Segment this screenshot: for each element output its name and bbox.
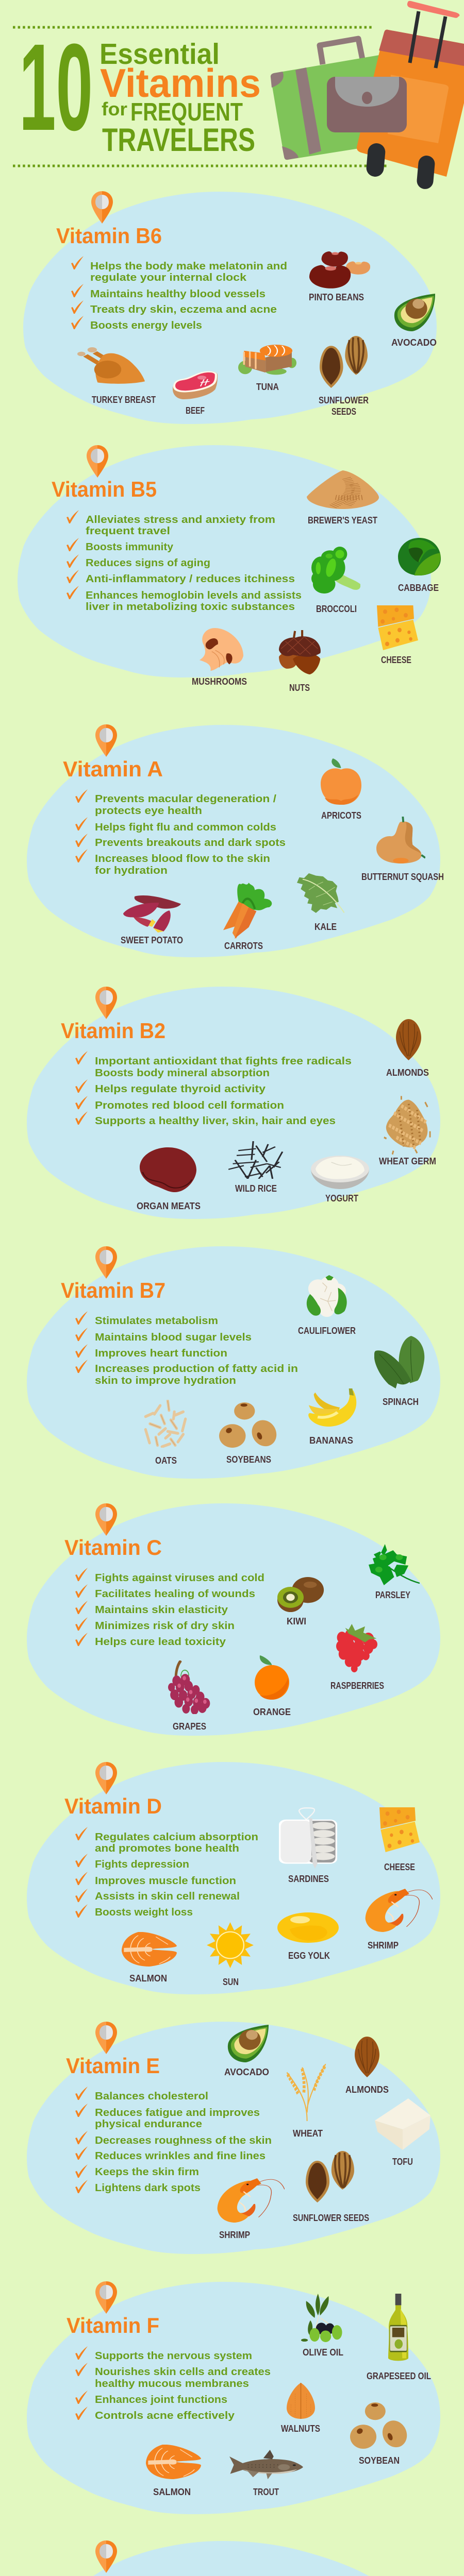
benefits list: Supports a healthy liver, skin, hair and eyes	[95, 1115, 336, 1127]
benefits list: Promotes red blood cell formation	[95, 1100, 284, 1111]
label: wheat germ: WHEAT GERM	[379, 1156, 436, 1166]
label: salmon: SALMON	[129, 1973, 167, 1984]
benefits list: Increases blood flow to the skin	[95, 853, 270, 865]
label: orange: ORANGE	[253, 1707, 291, 1717]
title line Vitamins: Vitamins	[100, 60, 261, 106]
icon: tuna	[238, 345, 296, 375]
benefits list	[75, 2087, 272, 2194]
label: sunflower seeds: SUNFLOWER SEEDS	[293, 2213, 369, 2223]
benefits list: Helps fight flu and common colds	[95, 822, 276, 833]
icon: oats	[145, 1401, 186, 1447]
label: trout: TROUT	[253, 2487, 279, 2497]
label: avocado: AVOCADO	[224, 2067, 269, 2077]
benefits list: Boosts energy levels	[90, 320, 202, 331]
label: tofu: TOFU	[392, 2157, 413, 2167]
icon: sweet potato	[123, 895, 181, 933]
benefits list: Keeps the skin firm	[95, 2166, 199, 2178]
benefits list: Reduces fatigue and improves	[95, 2107, 260, 2119]
label: spinach: SPINACH	[383, 1397, 419, 1407]
label: apricots: APRICOTS	[321, 810, 361, 821]
benefits list	[75, 1051, 352, 1127]
benefits list: Boosts immunity	[86, 541, 174, 553]
icon: grapes	[168, 1660, 210, 1715]
icon: shrimp	[366, 1889, 433, 1932]
panel: Vitamin F	[27, 2281, 440, 2514]
benefits list	[75, 1568, 264, 1648]
label: avocado: AVOCADO	[391, 337, 437, 348]
benefits list	[75, 1311, 298, 1386]
benefits list: Increases production of fatty acid in	[95, 1363, 298, 1375]
benefits list: Helps cure lead toxicity	[95, 1636, 226, 1648]
benefits list: Boosts body mineral absorption	[95, 1067, 270, 1079]
benefits list: Assists in skin cell renewal	[95, 1891, 240, 1902]
benefits list: for hydration	[95, 865, 168, 876]
heading: Vitamin A	[63, 757, 163, 781]
icon: bananas	[308, 1388, 356, 1427]
benefits list: Improves muscle function	[95, 1875, 236, 1887]
label: cheese: CHEESE	[384, 1862, 415, 1872]
icon: brewer's yeast	[307, 470, 379, 509]
benefits list: protects eye health	[95, 805, 202, 817]
benefits list: healthy mucous membranes	[95, 2378, 249, 2389]
panel: Vitamin E	[27, 2022, 440, 2254]
icon: sardines	[279, 1808, 337, 1869]
label: sunflower seeds: SUNFLOWER	[319, 395, 369, 405]
blob background	[27, 2541, 440, 2576]
panel: Vitamin A	[27, 724, 444, 957]
icon: grapeseed oil	[388, 2294, 408, 2361]
title word for: for	[102, 98, 127, 120]
icon: mushrooms	[200, 628, 243, 671]
blob background	[23, 192, 437, 424]
label: walnuts: WALNUTS	[281, 2424, 320, 2434]
label: sunflower seeds	[319, 395, 369, 417]
icon: spinach	[374, 1336, 424, 1388]
heading: Vitamin B6	[56, 224, 162, 248]
panel: Vitamin C	[27, 1503, 440, 1736]
blob background	[27, 1503, 440, 1736]
benefits list	[67, 510, 302, 613]
benefits list	[75, 2346, 271, 2421]
benefits list: Maintains skin elasticity	[95, 1604, 228, 1616]
heading: Vitamin D	[64, 1794, 162, 1818]
green suitcase handle	[320, 39, 362, 64]
icon: shrimp	[218, 2178, 285, 2223]
icon: broccoli	[311, 547, 360, 594]
heading: Vitamin B5	[52, 477, 157, 501]
benefits list: Enhances joint functions	[95, 2394, 227, 2405]
blob background	[27, 2282, 440, 2514]
benefits list: Important antioxidant that fights free radicals	[95, 1056, 352, 1067]
icon: location pin	[95, 2022, 117, 2054]
icon: wild rice	[228, 1141, 283, 1179]
header	[13, 1, 464, 189]
title number 10: 10	[19, 18, 93, 156]
benefits list	[75, 1827, 258, 1918]
icon: location pin	[95, 1503, 117, 1536]
label: almonds: ALMONDS	[386, 1067, 429, 1078]
benefits list: Maintains blood sugar levels	[95, 1332, 252, 1343]
label: grapeseed oil: GRAPESEED OIL	[367, 2371, 431, 2381]
benefits list: Decreases roughness of the skin	[95, 2135, 272, 2146]
icon: trout	[229, 2450, 303, 2479]
label: sweet potato: SWEET POTATO	[121, 935, 183, 945]
label: nuts: NUTS	[289, 683, 310, 693]
icon: cheese	[379, 1807, 420, 1852]
icon: raspberries	[336, 1624, 377, 1672]
icon: location pin	[95, 1762, 117, 1794]
label: carrots: CARROTS	[224, 941, 263, 951]
orange suitcase	[357, 30, 464, 177]
benefits list: Boosts weight loss	[95, 1907, 193, 1918]
label: soybean: SOYBEAN	[359, 2455, 400, 2466]
icon: almonds	[355, 2037, 379, 2077]
heading: Vitamin F	[67, 2313, 159, 2337]
icon: parsley	[369, 1544, 420, 1585]
benefits list: Minimizes risk of dry skin	[95, 1620, 235, 1632]
label: tuna: TUNA	[256, 382, 279, 392]
label: grapes: GRAPES	[173, 1721, 206, 1732]
icon: avocado	[228, 2025, 269, 2062]
icon: beef	[173, 371, 218, 399]
panel: Vitamin D	[27, 1762, 440, 1994]
icon: yogurt	[311, 1156, 369, 1189]
benefits list: Improves heart function	[95, 1348, 227, 1359]
icon: location pin	[95, 987, 117, 1019]
label: egg yolk: EGG YOLK	[288, 1951, 330, 1961]
icon: soybean	[350, 2402, 409, 2449]
benefits list: Enhances hemoglobin levels and assists	[86, 590, 302, 601]
benefits list: Fights depression	[95, 1859, 189, 1870]
blob background	[27, 725, 440, 957]
label: cabbage: CABBAGE	[398, 583, 439, 593]
benefits list: Treats dry skin, eczema and acne	[90, 304, 277, 315]
blob background	[27, 2022, 440, 2254]
benefits list	[71, 256, 287, 331]
icon: butternut squash	[376, 817, 425, 863]
blob background	[27, 1246, 440, 1479]
benefits list: and promotes bone health	[95, 1843, 239, 1854]
panel: Vitamin B6	[23, 191, 437, 424]
benefits list: Anti-inflammatory / reduces itchiness	[86, 573, 295, 585]
benefits list: regulate your internal clock	[90, 272, 247, 283]
label: brewer's yeast: BREWER'S YEAST	[308, 515, 377, 526]
small bag	[327, 77, 407, 132]
icon: luggage	[271, 1, 464, 190]
label: kiwi: KIWI	[287, 1616, 306, 1626]
icon: sunflower seeds	[306, 2151, 354, 2202]
label: salmon: SALMON	[153, 2487, 191, 2497]
label: sardines: SARDINES	[288, 1874, 329, 1884]
icon: cauliflower	[307, 1275, 347, 1317]
benefits list: Supports the nervous system	[95, 2350, 252, 2362]
icon: carrots	[223, 883, 272, 939]
label: almonds: ALMONDS	[345, 2084, 389, 2095]
icon: wheat	[287, 2064, 326, 2121]
label: shrimp: SHRIMP	[368, 1940, 399, 1951]
benefits list: Prevents breakouts and dark spots	[95, 837, 286, 849]
label: sun: SUN	[223, 1977, 239, 1987]
benefits list	[75, 789, 286, 876]
title word FREQUENT: FREQUENT	[130, 98, 243, 126]
benefits list: skin to improve hydration	[95, 1375, 236, 1386]
label: wheat: WHEAT	[293, 2128, 323, 2139]
label: pinto beans: PINTO BEANS	[309, 292, 364, 302]
icon: kale	[297, 873, 344, 913]
icon: location pin	[95, 724, 117, 757]
icon: cheese	[377, 605, 418, 650]
heading: Vitamin C	[64, 1535, 162, 1560]
icon: salmon	[146, 2445, 201, 2479]
panel: Vitamin B7	[27, 1246, 440, 1479]
icon: location pin	[95, 2281, 117, 2314]
label: yogurt: YOGURT	[325, 1193, 358, 1204]
label: sunflower seeds: SEEDS	[332, 406, 356, 417]
benefits list: Maintains healthy blood vessels	[90, 289, 266, 300]
label: raspberries: RASPBERRIES	[330, 1681, 384, 1691]
icon: sun	[207, 1922, 254, 1968]
benefits list: Reduces wrinkles and fine lines	[95, 2150, 266, 2162]
benefits list: Prevents macular degeneration /	[95, 793, 276, 805]
icon: avocado	[394, 294, 435, 331]
label: mushrooms: MUSHROOMS	[192, 676, 247, 687]
heading: Vitamin E	[66, 2054, 160, 2078]
icon: location pin	[95, 2540, 117, 2573]
icon: nuts	[279, 630, 321, 674]
benefits list: physical endurance	[95, 2119, 202, 2130]
label: soybeans: SOYBEANS	[226, 1454, 271, 1465]
label: butternut squash: BUTTERNUT SQUASH	[361, 872, 444, 882]
benefits list: Facilitates healing of wounds	[95, 1588, 255, 1600]
label: parsley: PARSLEY	[375, 1590, 410, 1600]
icon: organ meats	[140, 1147, 196, 1192]
icon: location pin	[91, 191, 113, 224]
label: bananas: BANANAS	[309, 1435, 353, 1446]
label: olive oil: OLIVE OIL	[303, 2347, 343, 2358]
label: organ meats: ORGAN MEATS	[137, 1201, 201, 1211]
panel: Vitamin B5	[18, 445, 441, 693]
icon: orange	[255, 1655, 289, 1700]
benefits list: Controls acne effectively	[95, 2410, 235, 2421]
title	[19, 18, 261, 158]
label: wild rice: WILD RICE	[235, 1183, 277, 1194]
suitcase strap	[295, 67, 321, 155]
label: kale: KALE	[314, 922, 337, 932]
panel: Vitamin K	[64, 2540, 369, 2576]
icon: apricots	[321, 758, 361, 805]
blob background	[18, 445, 431, 677]
title line Essential: Essential	[100, 38, 220, 71]
label: beef: BEEF	[186, 405, 205, 416]
title line TRAVELERS: TRAVELERS	[102, 122, 255, 158]
label: shrimp: SHRIMP	[219, 2230, 250, 2240]
icon: soybeans	[219, 1402, 279, 1448]
icon: egg yolk	[277, 1912, 339, 1943]
icon: cabbage	[398, 538, 441, 575]
icon: walnuts	[287, 2383, 315, 2419]
label: cauliflower: CAULIFLOWER	[298, 1326, 356, 1336]
heading: Vitamin B7	[61, 1278, 165, 1302]
panel: Vitamin B2	[27, 987, 440, 1219]
icon: sunflower seeds	[320, 336, 368, 388]
label: turkey breast: TURKEY BREAST	[92, 395, 156, 405]
blob background	[27, 987, 440, 1219]
benefits list: Alleviates stress and anxiety from	[86, 514, 275, 526]
green suitcase	[271, 55, 379, 160]
icon: wheat germ	[384, 1096, 430, 1155]
suitcase telescoping handle	[410, 11, 445, 68]
benefits list: liver in metabolizing toxic substances	[86, 601, 295, 613]
label: broccoli: BROCCOLI	[316, 604, 357, 614]
benefits list: Balances cholesterol	[95, 2091, 208, 2102]
icon: turkey breast	[77, 347, 145, 384]
heading: Vitamin B2	[61, 1019, 165, 1043]
benefits list: Fights against viruses and cold	[95, 1572, 264, 1584]
suitcase wheels	[366, 143, 386, 177]
benefits list: frequent travel	[86, 526, 170, 537]
icon: pinto beans	[309, 251, 370, 289]
icon: kiwi	[277, 1577, 324, 1612]
label: cheese: CHEESE	[381, 655, 411, 665]
benefits list: Nourishes skin cells and creates	[95, 2366, 271, 2378]
benefits list: Helps the body make melatonin and	[90, 261, 287, 272]
label: oats: OATS	[155, 1455, 177, 1466]
blob background	[27, 1762, 440, 1994]
benefits list: Lightens dark spots	[95, 2182, 201, 2194]
icon: location pin	[95, 1246, 117, 1279]
benefits list: Stimulates metabolism	[95, 1315, 218, 1327]
icon: salmon	[122, 1932, 177, 1967]
benefits list: Reduces signs of aging	[86, 557, 210, 569]
icon: almonds	[396, 1019, 421, 1060]
benefits list: Helps regulate thyroid activity	[95, 1083, 266, 1095]
icon: tofu	[375, 2098, 430, 2150]
icon: olive oil	[301, 2294, 342, 2342]
icon: location pin	[87, 445, 108, 478]
benefits list: Regulates calcium absorption	[95, 1832, 258, 1843]
